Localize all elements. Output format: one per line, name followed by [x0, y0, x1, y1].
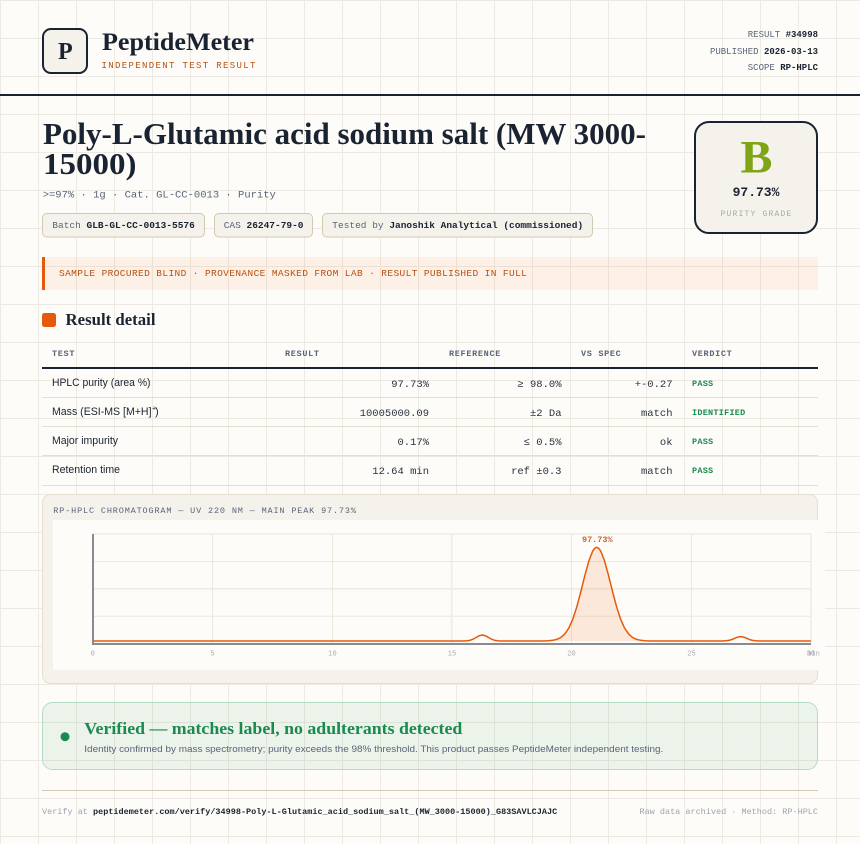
icon: verified dot: [60, 732, 70, 741]
row: retention time: [52, 464, 713, 478]
result metadata: PUBLISHED 2026-03-13: [710, 47, 818, 57]
product subtitle: >=97% · 1g · Cat. GL-CC-0013 · Purity: [43, 190, 276, 202]
x axis labels: 25: [687, 651, 696, 659]
row: retention time: PASS: [692, 466, 713, 476]
row: HPLC purity: +-0.27: [635, 379, 672, 391]
grade badge: [695, 122, 817, 233]
table header: VS SPEC: [581, 349, 621, 359]
table header: REFERENCE: [449, 349, 501, 359]
row: major impurity: ≤ 0.5%: [524, 437, 562, 449]
panel: chromatogram: [42, 494, 825, 684]
row: mass: [52, 406, 746, 420]
section heading: result detail: Result detail: [66, 310, 156, 329]
chromatogram trace: [93, 547, 811, 641]
product title: [43, 116, 646, 181]
result metadata: RESULT #34998: [748, 30, 818, 40]
peak label: 97.73%: [582, 535, 613, 545]
brand tagline: INDEPENDENT TEST RESULT: [102, 61, 257, 71]
row: major impurity: PASS: [692, 437, 713, 447]
row: retention time: Retention time: [52, 464, 120, 476]
grade purity value: 97.73%: [733, 185, 780, 200]
logo mark: [43, 29, 87, 73]
x axis labels: 5: [210, 651, 215, 659]
row: major impurity: [52, 435, 713, 449]
chart axes: [93, 534, 811, 644]
x axis labels: 15: [448, 651, 456, 659]
chip: tested by: [322, 214, 592, 237]
row: mass: ): [155, 406, 159, 418]
row: HPLC purity: PASS: [692, 379, 713, 389]
logo mark: P: [58, 39, 73, 65]
table header: VERDICT: [692, 349, 732, 359]
metadata chips: [42, 214, 592, 237]
row: HPLC purity: [52, 377, 713, 391]
blind sampling notice: [42, 257, 818, 290]
row: HPLC purity: ≥ 98.0%: [517, 379, 562, 391]
x axis labels: 10: [328, 651, 337, 659]
results table: [42, 349, 818, 486]
row: mass: ±2 Da: [530, 408, 562, 420]
x axis labels: 0: [91, 651, 95, 659]
x axis labels: min: [807, 651, 820, 659]
result metadata: SCOPE RP-HPLC: [748, 63, 819, 73]
grade letter: B: [740, 132, 772, 184]
row: mass: +: [152, 406, 156, 412]
result metadata: [710, 30, 819, 73]
header: [43, 29, 819, 73]
chromatogram caption: RP-HPLC CHROMATOGRAM — UV 220 NM — MAIN PEAK 97.73%: [53, 506, 357, 516]
chip: CAS: [214, 214, 312, 237]
verification link: Verify at peptidemeter.com/verify/34998-Poly-L-Glutamic_acid_sodium_salt_(MW_3000-15000)_G83SAVLCJAJC: [42, 807, 557, 817]
brand name: PeptideMeter: [102, 29, 254, 56]
blind sampling notice: SAMPLE PROCURED BLIND · PROVENANCE MASKED FROM LAB · RESULT PUBLISHED IN FULL: [59, 268, 527, 279]
verdict heading: Verified — matches label, no adulterants detected: [84, 719, 463, 738]
row: mass: 10005000.09: [360, 408, 429, 420]
product title: 15000): [43, 146, 136, 181]
row: retention time: ref ±0.3: [511, 466, 562, 478]
grade caption: PURITY GRADE: [720, 210, 793, 219]
row: HPLC purity: 97.73%: [391, 379, 430, 391]
row: major impurity: Major impurity: [52, 435, 118, 447]
row: retention time: match: [641, 466, 672, 478]
table header: [52, 349, 732, 359]
table header: RESULT: [285, 349, 320, 359]
chip: CAS: CAS 26247-79-0: [224, 220, 304, 231]
table header: TEST: [52, 349, 75, 359]
x axis labels: 20: [567, 651, 576, 659]
chip: tested by: Tested by Janoshik Analytical (commissioned): [332, 220, 583, 231]
product title: Poly-L-Glutamic acid sodium salt (MW 3000-: [43, 116, 646, 151]
row: HPLC purity: HPLC purity (area %): [52, 377, 150, 389]
x axis labels: 30: [807, 651, 815, 659]
chip: batch: Batch GLB-GL-CC-0013-5576: [52, 220, 195, 231]
row: mass: IDENTIFIED: [692, 408, 746, 418]
footer: [42, 790, 818, 817]
row: mass: Mass (ESI-MS [M+H]: [52, 406, 152, 418]
row: mass: match: [641, 408, 672, 420]
header rule: [0, 94, 860, 96]
row: retention time: 12.64 min: [372, 466, 429, 478]
archive note: Raw data archived · Method: RP-HPLC: [639, 807, 818, 817]
row: major impurity: ok: [660, 437, 672, 449]
peak area fill: [543, 547, 651, 641]
verdict detail: Identity confirmed by mass spectrometry; purity exceeds the 98% threshold. This product passes PeptideMeter independent testing.: [84, 744, 663, 755]
verdict callout: [42, 702, 818, 770]
chip: batch: [42, 214, 204, 237]
chromatogram chart: [53, 520, 825, 670]
row: major impurity: 0.17%: [397, 437, 430, 449]
x axis labels: [91, 651, 820, 659]
